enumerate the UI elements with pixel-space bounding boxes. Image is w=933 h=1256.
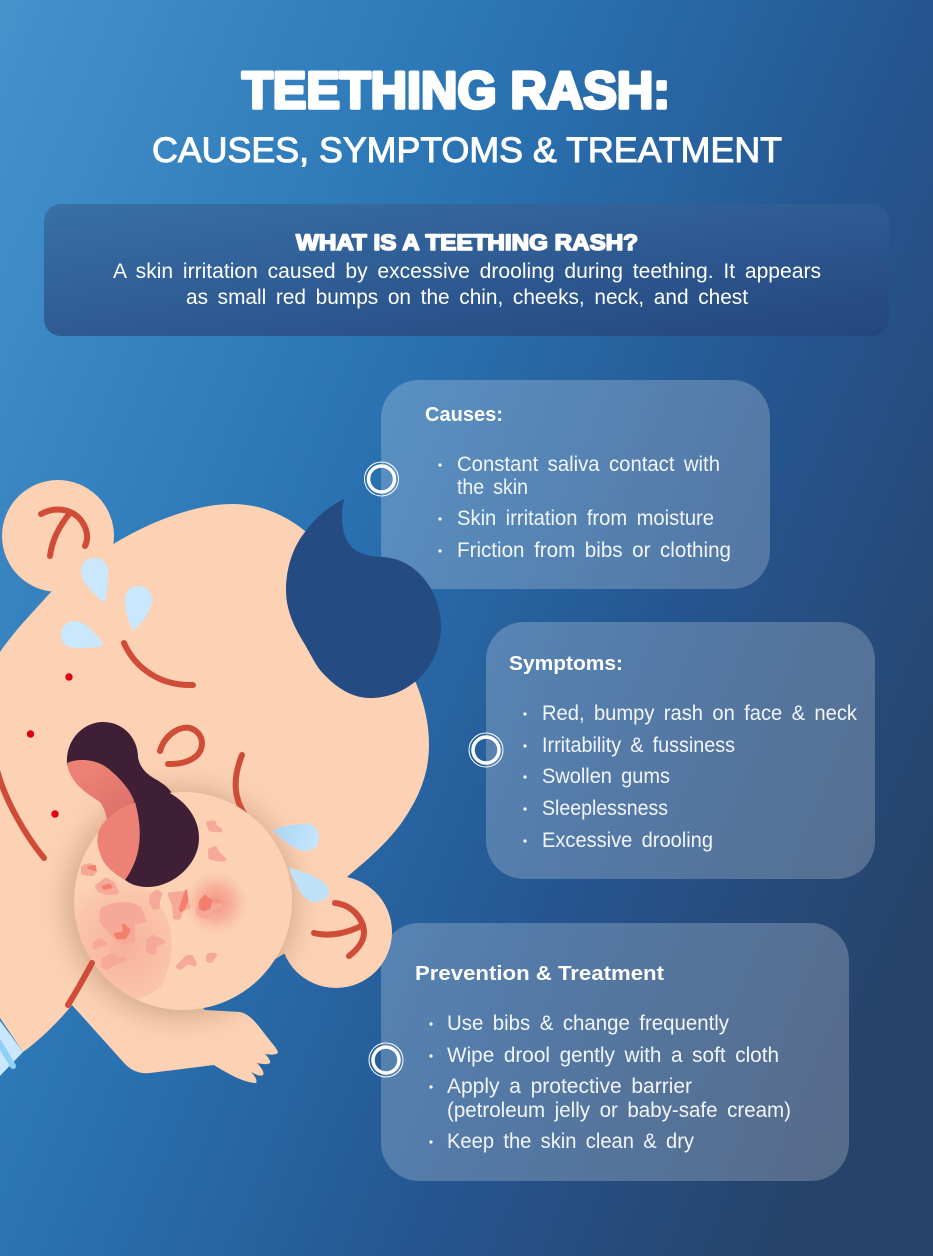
prevention list: Use bibs & change frequently: [447, 1011, 729, 1035]
prevention list: Wipe drool gently with a soft cloth: [447, 1043, 779, 1067]
ear mark lower: [314, 903, 364, 956]
icon: hair: [286, 499, 441, 698]
mouth upper: [67, 722, 172, 830]
icon: connector ring symptoms: [469, 733, 503, 767]
chin circle with rash: [60, 792, 292, 1010]
ear mark top: [41, 510, 87, 556]
causes list: Friction from bibs or clothing: [457, 538, 731, 562]
causes heading: Causes:: [425, 404, 503, 426]
nose: [160, 728, 202, 764]
panel: what is a teething rash: [44, 204, 889, 336]
symptoms list: Red, bumpy rash on face & neck: [542, 701, 857, 725]
icon: tears on chin: [273, 824, 329, 902]
prevention list: Keep the skin clean & dry: [447, 1129, 694, 1153]
symptoms list: Irritability & fussiness: [542, 733, 735, 757]
icon: connector ring prevention: [369, 1043, 403, 1077]
causes list: Constant saliva contact with: [457, 452, 720, 476]
red dots: [27, 673, 73, 818]
baby body and head: [0, 480, 429, 1083]
intro text: [113, 259, 821, 309]
prevention list: Apply a protective barrier: [447, 1074, 692, 1098]
prevention list: (petroleum jelly or baby-safe cream): [447, 1098, 791, 1122]
subtitle: CAUSES, SYMPTOMS & TREATMENT: [152, 131, 782, 170]
symptoms heading: Symptoms:: [509, 653, 623, 675]
intro text: A skin irritation caused by excessive drooling during teething. It appears: [113, 259, 821, 283]
baby illustration: [0, 480, 441, 1083]
tongue lower: [97, 802, 140, 880]
title: [152, 62, 782, 170]
prevention list: [429, 1011, 791, 1153]
symptoms list: Swollen gums: [542, 764, 670, 788]
icon: connector ring causes: [364, 462, 398, 496]
rash glow: [75, 876, 244, 999]
panel: symptoms: [486, 622, 875, 879]
chin shadow: [67, 789, 295, 1017]
closed eye: [124, 643, 193, 685]
symptoms list: [523, 701, 857, 852]
mouth lower: [97, 791, 199, 887]
arm line: [0, 770, 44, 858]
causes list: the skin: [457, 475, 528, 499]
tongue upper: [67, 760, 136, 825]
cheek line: [236, 755, 245, 815]
panel: causes: [381, 380, 770, 589]
prevention heading: Prevention & Treatment: [415, 963, 664, 985]
intro heading: WHAT IS A TEETHING RASH?: [296, 230, 638, 255]
panel: prevention and treatment: [381, 923, 849, 1181]
icon: tears on forehead: [61, 558, 152, 648]
neck line: [68, 963, 92, 1005]
symptoms list: Sleeplessness: [542, 796, 668, 820]
symptoms list: Excessive drooling: [542, 828, 713, 852]
rash patches: [83, 823, 224, 967]
title: TEETHING RASH:: [242, 62, 670, 120]
causes list: Skin irritation from moisture: [457, 506, 714, 530]
icon: sleeve: [0, 1018, 23, 1078]
causes list: [438, 452, 731, 562]
intro text: as small red bumps on the chin, cheeks, neck, and chest: [186, 285, 748, 309]
